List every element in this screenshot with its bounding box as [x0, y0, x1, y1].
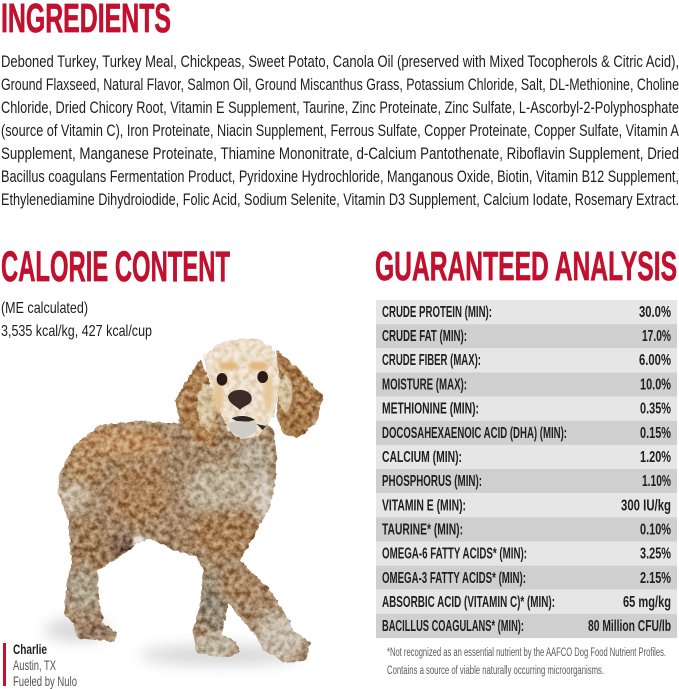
table: nutrient analysis: TAURINE* (MIN):	[382, 522, 463, 538]
table: nutrient analysis: CRUDE FAT (MIN):	[382, 328, 467, 345]
table: nutrient analysis: CRUDE FIBER (MAX):	[382, 352, 481, 369]
caption text: Austin, TX	[13, 657, 56, 673]
dog shadow	[45, 619, 300, 665]
table: nutrient analysis: METHIONINE (MIN):	[382, 400, 479, 418]
footnote	[387, 647, 666, 677]
panel: guaranteed analysis	[375, 243, 677, 677]
dog eyes	[217, 371, 268, 386]
dog body and legs	[58, 397, 310, 663]
table: nutrient analysis: CALCIUM (MIN):	[382, 449, 462, 466]
text block: calorie values: 3,535 kcal/kg, 427 kcal/cup	[1, 323, 152, 340]
dog ears and head fur	[175, 338, 323, 447]
dog face	[214, 362, 273, 439]
caption text: Charlie	[13, 641, 47, 657]
table: nutrient analysis: OMEGA-3 FATTY ACIDS* (MIN):	[382, 570, 526, 587]
dog nose	[228, 390, 252, 410]
caption text: Fueled by Nulo	[13, 673, 77, 689]
dog mouth	[232, 416, 255, 422]
panel: calorie content	[1, 243, 230, 340]
text block: calorie values	[1, 300, 152, 340]
panel: ingredients	[1, 0, 679, 209]
table: nutrient analysis: BACILLUS COAGULANS* (MIN):	[382, 618, 524, 635]
table: nutrient analysis: VITAMIN E (MIN):	[382, 498, 466, 514]
table: nutrient analysis: CRUDE PROTEIN (MIN):	[382, 304, 492, 321]
caption: Charlie	[3, 641, 77, 689]
table: nutrient analysis	[376, 300, 677, 638]
text block: calorie values: (ME calculated)	[1, 300, 88, 317]
caption text	[13, 641, 77, 689]
text block: ingredients list	[1, 52, 679, 209]
table: nutrient analysis: PHOSPHORUS (MIN):	[382, 473, 482, 490]
heading: calorie content: CALORIE CONTENT	[1, 243, 230, 291]
caption accent bar	[3, 643, 6, 686]
table: nutrient analysis: OMEGA-6 FATTY ACIDS* (MIN):	[382, 546, 527, 562]
table: nutrient analysis: ABSORBIC ACID (VITAMIN C)* (MIN):	[382, 594, 555, 611]
table: nutrient analysis: MOISTURE (MAX):	[382, 376, 467, 394]
photo: dog Charlie	[45, 338, 323, 665]
